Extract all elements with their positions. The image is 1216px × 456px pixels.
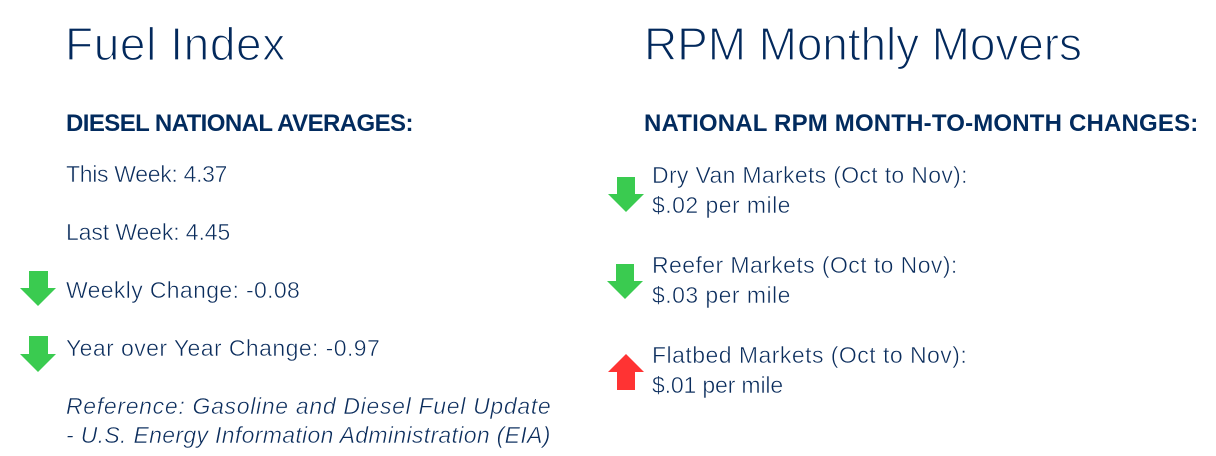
- text: reefer markets: Reefer Markets (Oct to Nov):: [652, 252, 958, 278]
- title: RPM Monthly Movers: RPM Monthly Movers: [644, 18, 1082, 70]
- icon: green down arrow dry van: [608, 177, 644, 212]
- text: this week: This Week: 4.37: [66, 161, 227, 187]
- text: last week: Last Week: 4.45: [66, 219, 230, 245]
- icon: green down arrow weekly: [20, 271, 56, 306]
- text: flatbed markets: [652, 342, 967, 398]
- icon: red up arrow flatbed: [608, 354, 644, 390]
- text: dry van markets: $.02 per mile: [652, 192, 791, 218]
- text: reefer markets: $.03 per mile: [652, 282, 791, 308]
- icon: green down arrow yearly: [20, 336, 56, 372]
- text: reference: [66, 393, 551, 448]
- text: reference: - U.S. Energy Information Administration (EIA): [66, 422, 551, 448]
- icon: green down arrow reefer: [607, 264, 643, 299]
- title: Fuel Index: Fuel Index: [65, 18, 286, 70]
- text: dry van markets: Dry Van Markets (Oct to Nov):: [652, 162, 968, 188]
- text: year over year change: Year over Year Change: -0.97: [66, 335, 380, 361]
- text: flatbed markets: Flatbed Markets (Oct to Nov):: [652, 342, 967, 368]
- heading: national RPM changes: NATIONAL RPM MONTH-TO-MONTH CHANGES:: [644, 110, 1198, 137]
- text: dry van markets: [652, 162, 968, 218]
- text: reefer markets: [652, 252, 958, 308]
- text: reference: Reference: Gasoline and Diesel Fuel Update: [66, 393, 551, 419]
- text: weekly change: Weekly Change: -0.08: [66, 277, 300, 303]
- text: flatbed markets: $.01 per mile: [652, 372, 783, 398]
- heading: diesel national averages: DIESEL NATIONAL AVERAGES:: [66, 110, 413, 137]
